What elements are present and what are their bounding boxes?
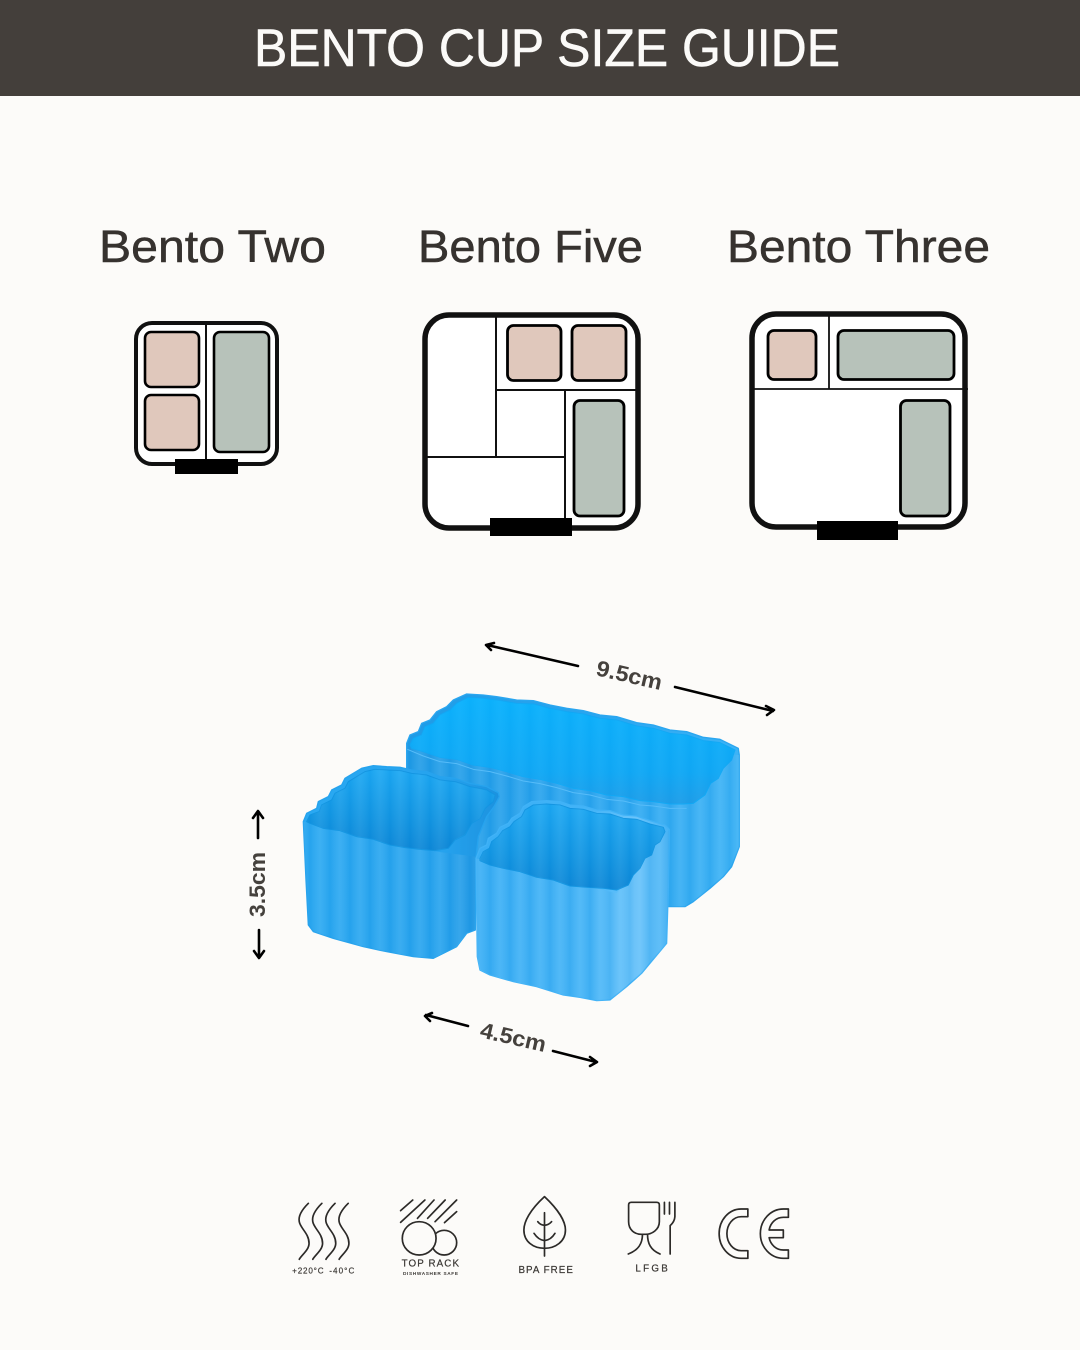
- dimension: 9.5cm width: 9.5cm: [594, 656, 665, 695]
- icon: top rack dishwasher safe: DISHWASHER SAFE: [403, 1271, 458, 1276]
- heading: Bento Two: Bento Two: [99, 221, 326, 272]
- icon: LFGB food safe: [628, 1202, 675, 1275]
- icon: temperature range: -40°C: [329, 1266, 355, 1275]
- panel: Bento Five: [418, 221, 643, 536]
- diagram: Bento Five lunchbox: [425, 315, 640, 536]
- dimension: 4.5cm width: [425, 1013, 597, 1066]
- icon: temperature range: +220°C: [292, 1266, 324, 1275]
- diagram: Bento Two lunchbox: [136, 323, 277, 474]
- photo: three blue silicone bento cups: [303, 694, 739, 1001]
- icon: top rack dishwasher safe: TOP RACK: [402, 1259, 460, 1270]
- certification icons row: [292, 1197, 788, 1276]
- dimension: 3.5cm height: [245, 811, 270, 958]
- dimension: 4.5cm width: 4.5cm: [478, 1018, 549, 1057]
- cup: small square left: [303, 766, 499, 958]
- cup: large rectangular: [407, 694, 739, 907]
- panel: Bento Three: [727, 221, 990, 540]
- panel: Bento Two: [99, 221, 326, 474]
- diagram: Bento Three lunchbox: [750, 314, 968, 540]
- icon: BPA free leaf: [518, 1197, 573, 1276]
- icon: temperature range: [292, 1203, 355, 1275]
- icon: top rack dishwasher safe: [401, 1200, 460, 1276]
- icon: LFGB food safe: LFGB: [635, 1264, 668, 1275]
- title banner: [0, 0, 1080, 96]
- heading: Bento Three: Bento Three: [727, 221, 990, 272]
- heading: Bento Five: Bento Five: [418, 221, 643, 272]
- cup: small square front: [476, 801, 669, 1001]
- icon: CE mark: [719, 1209, 788, 1258]
- title banner: BENTO CUP SIZE GUIDE: [254, 19, 840, 78]
- icon: BPA free leaf: BPA FREE: [518, 1265, 573, 1276]
- dimension: 9.5cm width: [486, 643, 774, 715]
- dimension: 3.5cm height: 3.5cm: [245, 852, 270, 917]
